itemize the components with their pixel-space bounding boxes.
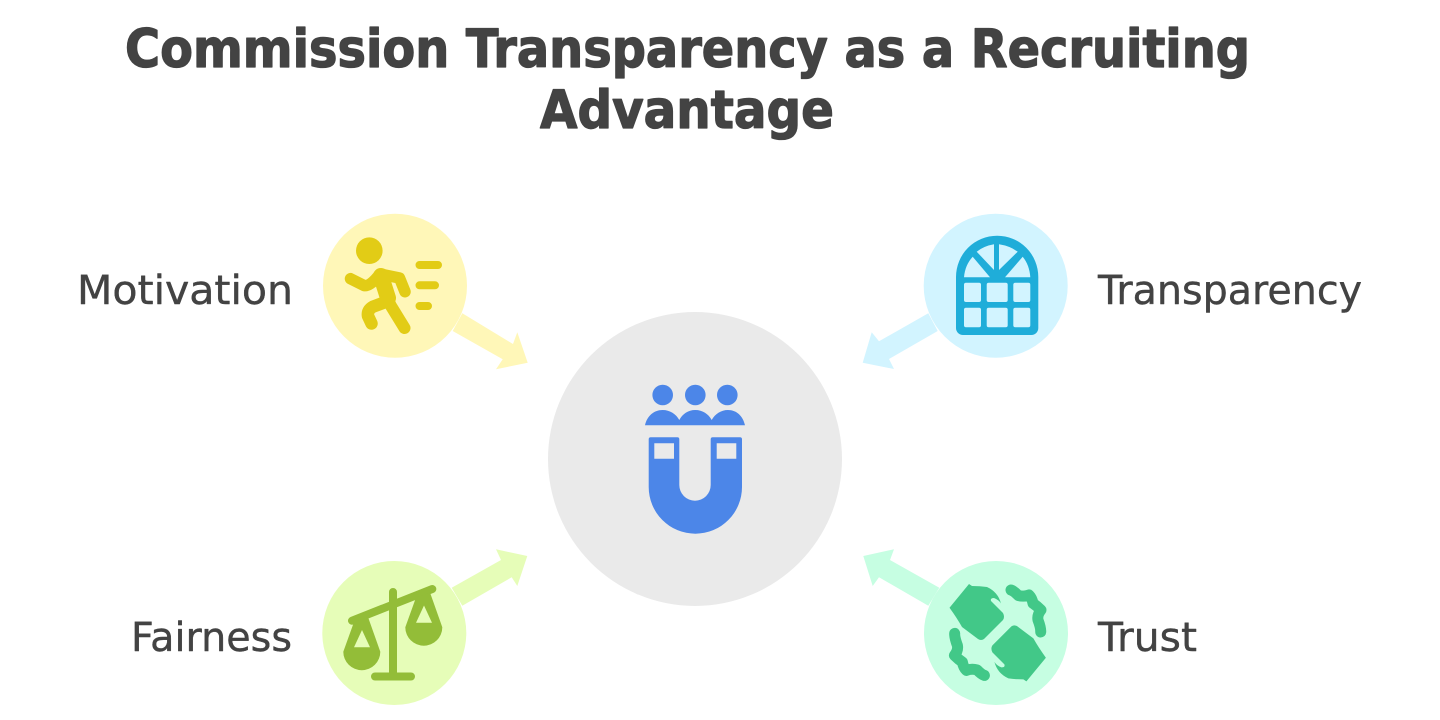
icon: running person [350, 237, 438, 328]
label: Trust: Trust [1097, 615, 1197, 661]
title: Commission Transparency as a Recruiting [125, 19, 1250, 80]
circle: Trust [924, 561, 1068, 705]
arrow: Fairness to center [452, 549, 527, 606]
node: Fairness [131, 549, 527, 705]
center circle: recruiting magnet [548, 312, 842, 606]
icon: handshake pieces [950, 584, 1046, 681]
label: Motivation: Motivation [77, 268, 293, 314]
circle: Motivation [323, 214, 467, 358]
node: Transparency [863, 214, 1362, 369]
title [125, 19, 1250, 141]
node: Motivation [77, 214, 528, 369]
icon: arched window [956, 236, 1038, 335]
label: Fairness: Fairness [131, 615, 292, 661]
title: Advantage [540, 80, 834, 141]
icon: people and magnet [645, 385, 745, 534]
circle: Transparency [924, 214, 1068, 358]
arrow: Motivation to center [453, 313, 528, 369]
label: Transparency: Transparency [1097, 268, 1362, 314]
arrow: Transparency to center [863, 313, 938, 369]
node: Trust [863, 549, 1197, 705]
icon: balance scale [343, 589, 442, 676]
arrow: Trust to center [863, 549, 939, 606]
circle: Fairness [322, 561, 466, 705]
